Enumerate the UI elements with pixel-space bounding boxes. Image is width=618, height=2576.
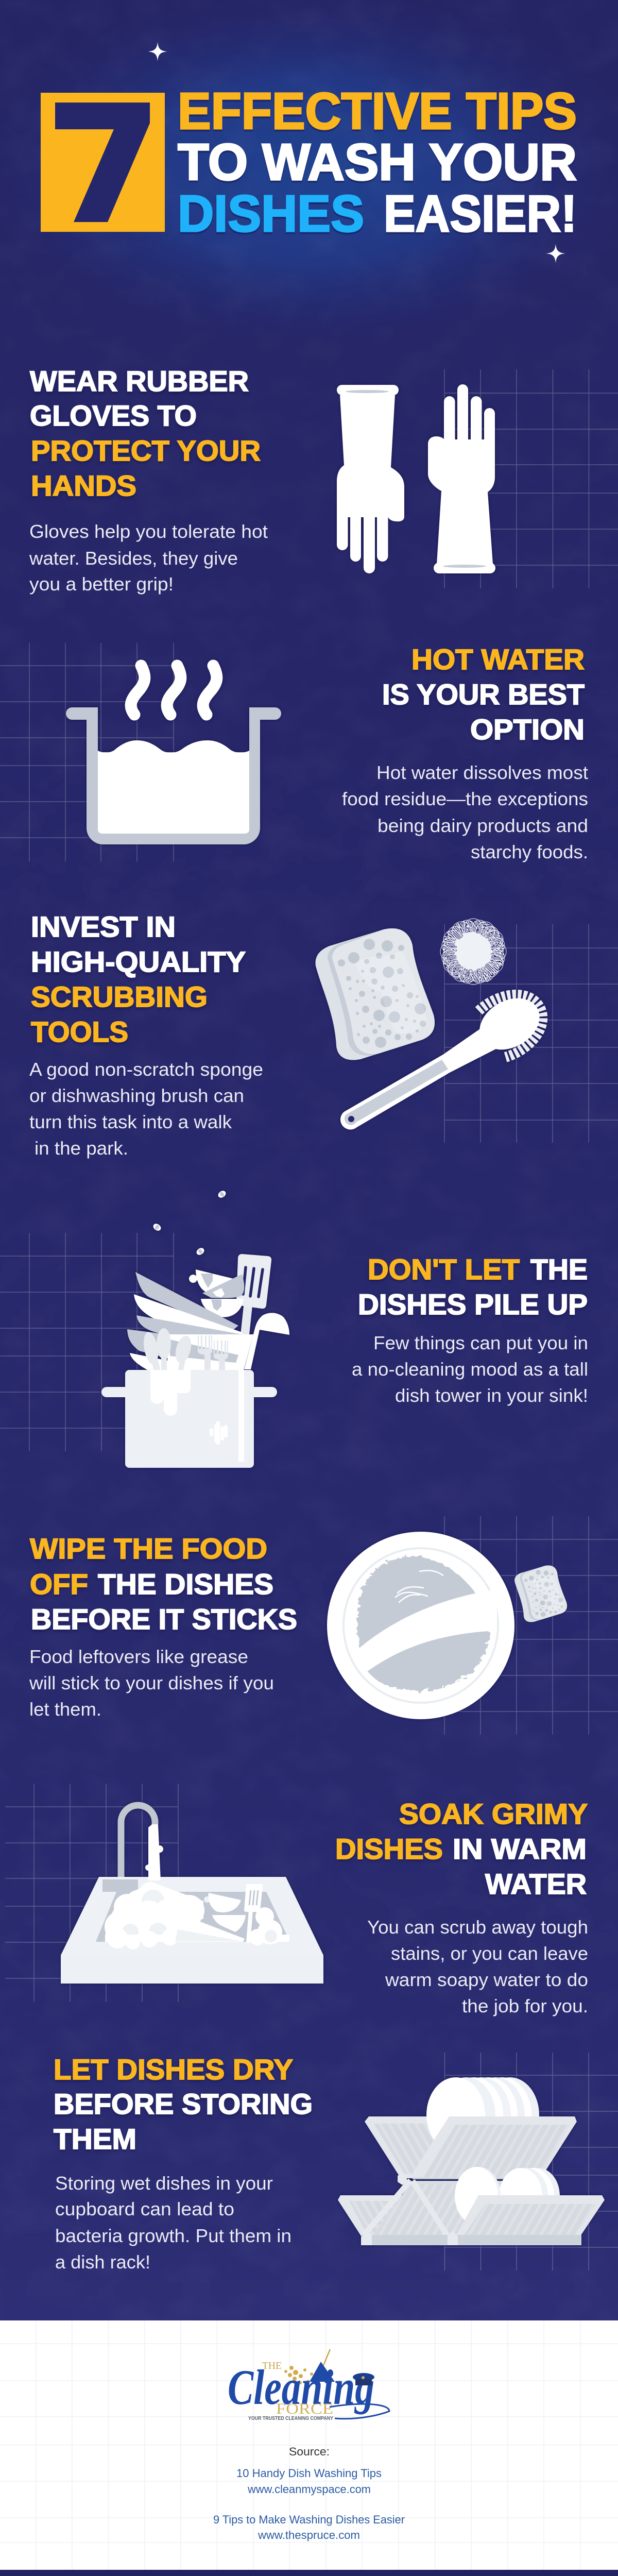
body text: or dishwashing brush can [29, 1085, 244, 1106]
body text: Few things can put you in [373, 1332, 588, 1353]
icon: dish brush [340, 982, 554, 1130]
right glove [428, 384, 495, 573]
heading [30, 1532, 297, 1635]
body text [29, 1646, 274, 1720]
body text: bacteria growth. Put them in [55, 2225, 291, 2246]
heading: DON'T LET [368, 1253, 520, 1285]
bottom band [0, 2570, 618, 2576]
body text: a no-cleaning mood as a tall [352, 1359, 588, 1380]
icon: steel wool scrubber [440, 919, 506, 985]
panel: tip 6 soak grimy dishes [61, 1798, 588, 2016]
sink counter [61, 1877, 323, 1955]
heading [358, 1253, 588, 1320]
body text: you a better grip! [29, 573, 174, 595]
source list: www.cleanmyspace.com [247, 2483, 371, 2496]
logo broom [310, 2349, 335, 2382]
icon: pot with piled dishes [101, 1189, 289, 1468]
plate [327, 1532, 514, 1719]
heading: PROTECT YOUR [31, 434, 261, 467]
body text: Hot water dissolves most [376, 762, 588, 783]
body text: Gloves help you tolerate hot [29, 521, 268, 542]
body text: food residue—the exceptions [342, 788, 588, 809]
back panels [338, 2116, 443, 2236]
heading: IN WARM [453, 1833, 587, 1865]
logo hat [353, 2373, 374, 2385]
body text: will stick to your dishes if you [29, 1672, 274, 1693]
body text [342, 762, 588, 862]
pot body [66, 707, 281, 844]
sparkle star [148, 42, 167, 61]
body text: A good non-scratch sponge [29, 1059, 263, 1080]
wiped streaks [396, 1570, 443, 1602]
logo wordmark: Cleaning [228, 2360, 374, 2415]
body text: a dish rack! [55, 2251, 150, 2273]
water [98, 740, 249, 834]
clean band [353, 1589, 497, 1673]
logo small text [248, 2360, 333, 2421]
plates [127, 1272, 253, 1370]
lower front panel [456, 2195, 605, 2236]
heading [30, 365, 261, 502]
number 7 badge [41, 93, 165, 232]
body text [55, 2173, 291, 2273]
heading: DISHES [335, 1833, 443, 1865]
title text: TO WASH YOUR [178, 133, 577, 191]
ladle [244, 1313, 289, 1369]
heading: THEM [54, 2123, 136, 2155]
body text: warm soapy water to do [385, 1969, 588, 1990]
heading: DISHES PILE UP [358, 1288, 588, 1320]
basin [96, 1892, 290, 1942]
heading: IS YOUR BEST [382, 678, 585, 710]
panel: tip 1 rubber gloves [29, 365, 495, 595]
heading [54, 2053, 313, 2155]
title [41, 82, 577, 243]
foam [105, 1824, 289, 1950]
footer panel [0, 2320, 618, 2570]
heading [335, 1798, 588, 1900]
heading: THE DISHES [98, 1568, 273, 1600]
bubbles [152, 1189, 227, 1257]
title text: DISHES [178, 185, 364, 243]
heading: TOOLS [31, 1015, 128, 1048]
icon: rubber gloves [337, 384, 495, 573]
body text [29, 1059, 263, 1159]
logo small text: YOUR TRUSTED CLEANING COMPANY [248, 2416, 333, 2421]
panel: tip 5 wipe the food [29, 1532, 567, 1720]
icon: small sponge [514, 1566, 567, 1622]
body text: stains, or you can leave [391, 1943, 588, 1964]
source list: 10 Handy Dish Washing Tips [236, 2467, 382, 2480]
logo: The Cleaning Force [228, 2349, 389, 2421]
icon: sponge [316, 928, 435, 1060]
upper front panel [413, 2116, 577, 2179]
source list: 9 Tips to Make Washing Dishes Easier [213, 2513, 405, 2526]
icon: steaming pot [66, 666, 281, 844]
title text [178, 82, 577, 243]
icon: plate being wiped [327, 1532, 567, 1719]
title text: EASIER! [384, 185, 577, 243]
heading: OPTION [470, 713, 585, 745]
panel: tip 7 let dishes dry [54, 2053, 605, 2273]
bowls [189, 1269, 244, 1317]
pot handles [101, 1387, 277, 1397]
heading: OFF [30, 1568, 88, 1600]
body text: cupboard can lead to [55, 2198, 234, 2219]
source list [213, 2445, 405, 2541]
bowls in sink [204, 1893, 246, 1932]
forks [198, 1335, 228, 1370]
body text [29, 521, 268, 595]
heading: SOAK GRIMY [399, 1798, 588, 1830]
title text: EFFECTIVE TIPS [178, 82, 577, 140]
body text: let them. [29, 1699, 101, 1720]
body text: You can scrub away tough [367, 1917, 588, 1938]
heading: LET DISHES DRY [54, 2053, 293, 2086]
pot body [125, 1370, 254, 1468]
faucet base [102, 1879, 138, 1892]
body text: Storing wet dishes in your [55, 2173, 273, 2194]
spatula in sink [244, 1884, 263, 1943]
heading: THE [530, 1253, 588, 1285]
body text: turn this task into a walk [29, 1111, 232, 1132]
body text: Food leftovers like grease [29, 1646, 248, 1667]
heading: SCRUBBING [31, 980, 208, 1013]
lower plates [455, 2167, 560, 2225]
heading: WEAR RUBBER [30, 365, 249, 397]
heading [382, 643, 585, 745]
body text: starchy foods. [471, 841, 588, 862]
panel: tip 3 scrubbing tools [29, 910, 554, 1159]
large plates [426, 2077, 539, 2153]
steam [131, 666, 217, 715]
heading: BEFORE STORING [54, 2088, 313, 2120]
food smear [358, 1556, 489, 1691]
source list: Source: [289, 2445, 330, 2458]
sparkle star [546, 244, 565, 263]
spoons [142, 1328, 194, 1371]
logo small text: FORCE [276, 2400, 333, 2417]
heading: WATER [485, 1868, 587, 1900]
logo small text: THE [262, 2360, 282, 2371]
heading: WIPE THE FOOD [30, 1532, 267, 1565]
icon: dish rack [338, 2077, 605, 2245]
logo sparkles [284, 2366, 313, 2384]
lower middle panel [363, 2173, 510, 2236]
spatula [236, 1254, 271, 1340]
heading [31, 910, 246, 1048]
pot highlights [150, 1370, 244, 1462]
panel: tip 2 hot water [66, 643, 588, 862]
body text [352, 1332, 588, 1406]
heading: HIGH-QUALITY [31, 945, 246, 978]
heading: GLOVES TO [30, 399, 197, 432]
body text: in the park. [35, 1138, 128, 1159]
body text: being dairy products and [377, 815, 588, 836]
logo swoosh [330, 2404, 389, 2419]
heading: BEFORE IT STICKS [31, 1603, 297, 1635]
heading: HANDS [31, 469, 136, 502]
heading: INVEST IN [31, 910, 176, 943]
icon: sink with soapy dishes [61, 1805, 323, 1984]
heading: HOT WATER [411, 643, 585, 675]
body text: water. Besides, they give [29, 548, 238, 569]
left glove [337, 385, 404, 573]
body text: the job for you. [462, 1995, 588, 2016]
body text: dish tower in your sink! [395, 1385, 588, 1406]
rack base [361, 2231, 581, 2245]
source list: www.thespruce.com [258, 2529, 360, 2541]
panel: tip 4 dishes pile [101, 1189, 588, 1468]
faucet [121, 1805, 155, 1880]
body text [367, 1917, 588, 2016]
